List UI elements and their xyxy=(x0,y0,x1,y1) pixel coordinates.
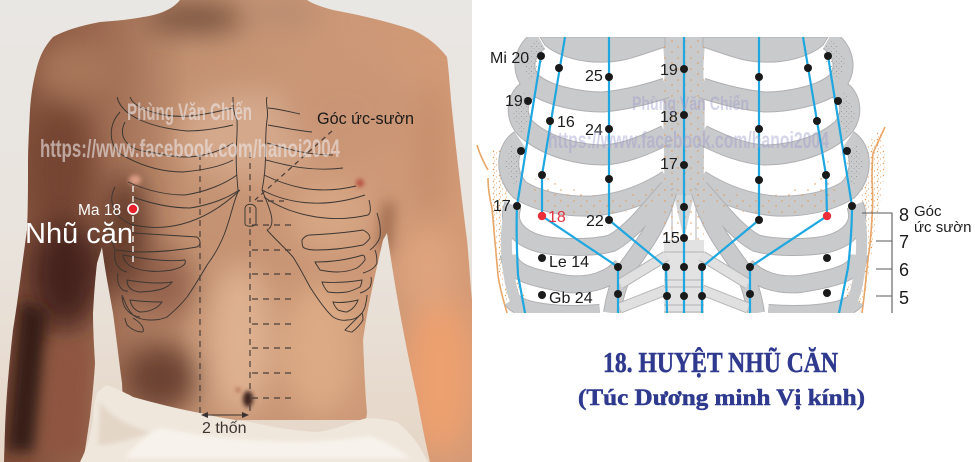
watermark on photo xyxy=(40,99,340,163)
point labels: Le 14 xyxy=(549,254,589,271)
watermark on photo: Phùng Văn Chiến xyxy=(127,99,252,126)
label: sternocostal angle on diagram xyxy=(914,203,971,236)
label: sternocostal angle: Góc ức-sườn xyxy=(317,110,414,128)
photo: torso and arms xyxy=(0,0,474,462)
watermark on photo: https://www.facebook.com/hanoi2004 xyxy=(40,135,340,163)
point labels: 19 xyxy=(505,93,523,110)
label: Nhu can: Nhũ căn xyxy=(25,218,133,250)
subheading: (Túc Dương minh Vị kính) xyxy=(578,385,865,410)
point labels: Gb 24 xyxy=(549,290,593,307)
rib numbers xyxy=(899,205,909,308)
rib numbers: 6 xyxy=(899,260,909,280)
watermark on diagram xyxy=(548,94,829,153)
point labels xyxy=(490,50,680,307)
skin outline and stipple xyxy=(477,127,885,313)
point labels: 22 xyxy=(586,213,604,230)
watermark on diagram: https://www.facebook.com/hanoi2004 xyxy=(548,127,829,153)
title block xyxy=(578,348,865,410)
point labels: 19 xyxy=(660,62,678,79)
point labels: Mi 20 xyxy=(490,50,529,67)
panel: rib cage diagram with meridians xyxy=(477,37,971,314)
point labels: 17 xyxy=(493,198,511,215)
white dashed line through acupoint xyxy=(132,186,134,262)
acupoint dots xyxy=(513,52,856,300)
arrow: 2 thon width xyxy=(201,412,249,418)
rib cage line overlay xyxy=(107,97,380,332)
rib numbers: 5 xyxy=(899,288,909,308)
panel: photo of male chest with rib overlay xyxy=(0,0,474,462)
point labels: 15 xyxy=(662,230,680,247)
rib numbers: 7 xyxy=(899,232,909,252)
point labels: 24 xyxy=(585,122,603,139)
label: 2 thon: 2 thốn xyxy=(202,420,246,437)
point labels: 17 xyxy=(660,156,678,173)
meridian lines xyxy=(517,37,852,313)
rib numbers: 8 xyxy=(899,205,909,225)
watermark on diagram: Phùng Văn Chiến xyxy=(632,94,749,115)
label: 18 in red: 18 xyxy=(548,209,566,226)
point labels: 16 xyxy=(557,114,575,131)
rib number bracket xyxy=(862,213,892,313)
label: sternocostal angle on diagram: Góc xyxy=(914,203,942,220)
point labels: 18 xyxy=(660,109,678,126)
point labels: 25 xyxy=(585,68,603,85)
acupoint marker Ma 18 xyxy=(128,204,138,214)
ribs and sternum xyxy=(505,37,863,314)
highlighted acupoints 18 xyxy=(538,212,831,220)
photo: white cloth at the waist xyxy=(80,385,428,462)
label: Ma 18: Ma 18 xyxy=(78,202,121,219)
2 thon dashed measurement lines xyxy=(200,131,332,414)
heading: 18. HUYỆT NHŨ CĂN xyxy=(603,348,838,379)
label: sternocostal angle on diagram: ức sườn xyxy=(914,219,971,236)
